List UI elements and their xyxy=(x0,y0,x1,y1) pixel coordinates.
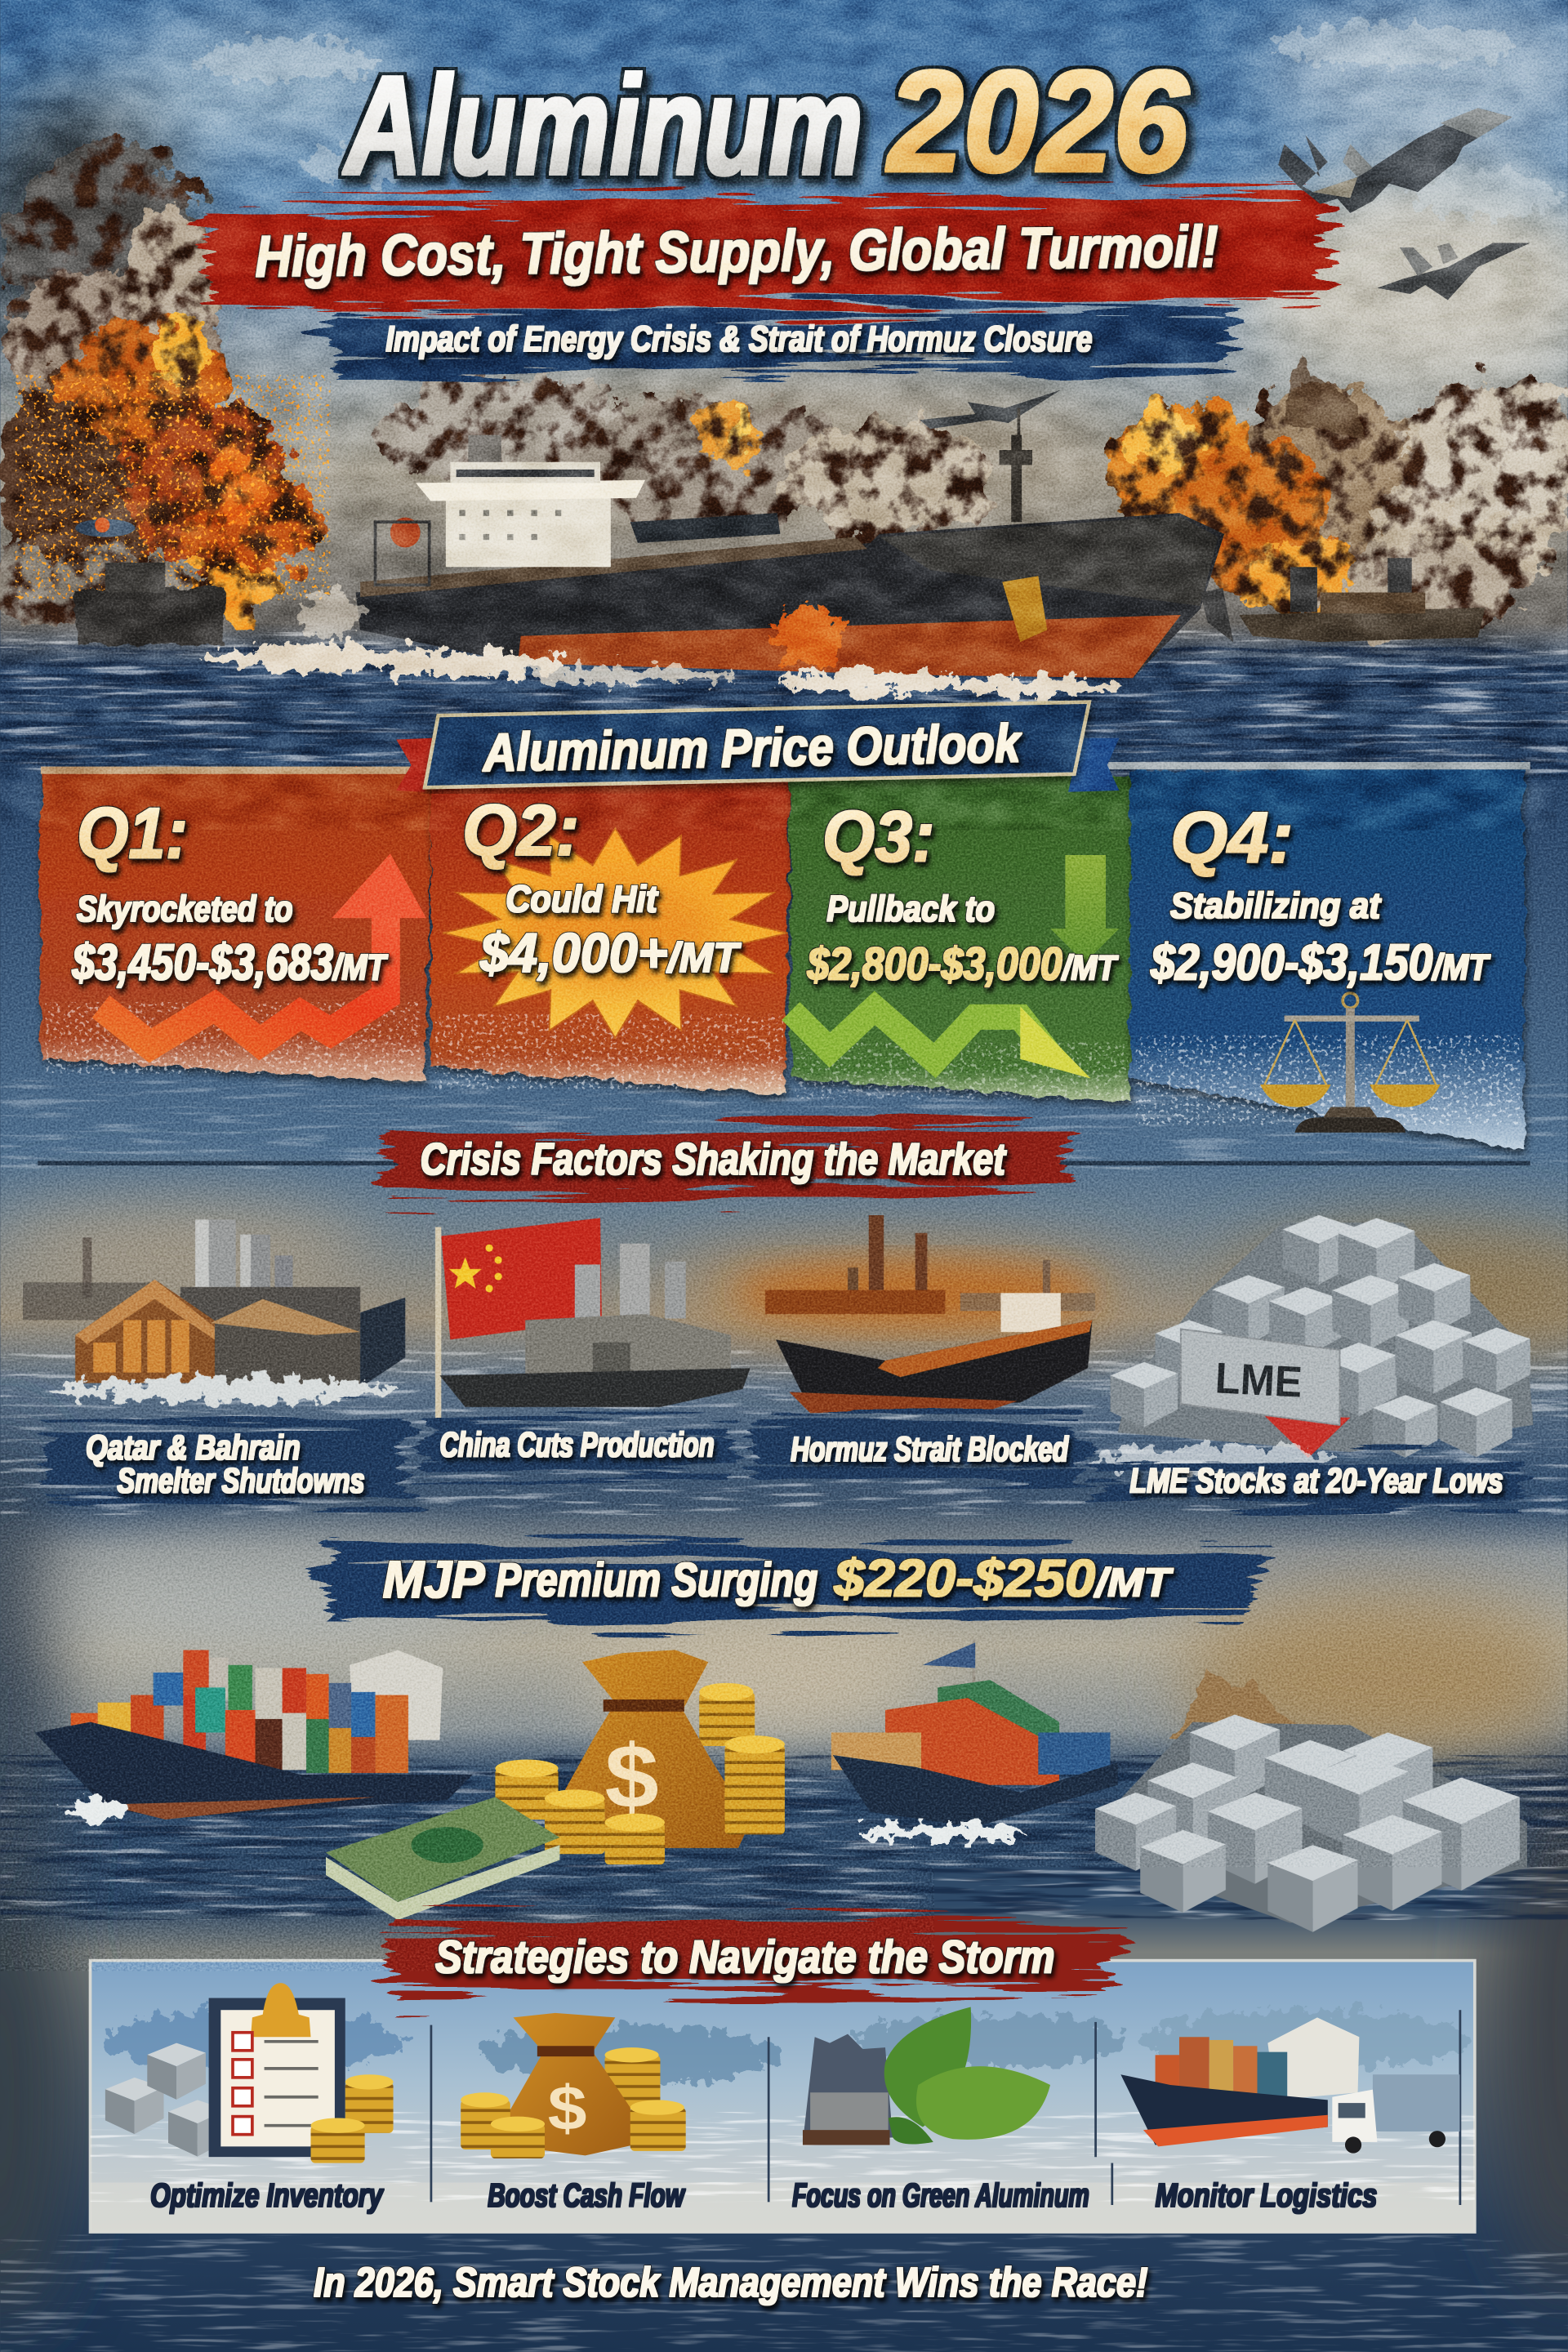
containers xyxy=(71,1650,408,1773)
coin stacks front xyxy=(724,1744,785,1834)
panel: strategies xyxy=(91,1961,1475,2232)
footer slogan: In 2026, Smart Stock Management Wins the Race! xyxy=(314,2258,1147,2305)
superstructure xyxy=(350,1650,443,1740)
label: Focus on Green Aluminum: Focus on Green Aluminum xyxy=(792,2176,1089,2214)
superstructure xyxy=(375,435,645,585)
label: Monitor Logistics: Monitor Logistics xyxy=(1156,2176,1377,2214)
Q4 text: Stabilizing at xyxy=(1170,886,1382,926)
Q3 text: Pullback to xyxy=(826,889,995,929)
icon: inventory clipboard xyxy=(105,1983,394,2163)
heading: price outlook ribbon: Aluminum Price Outlook xyxy=(481,714,1023,783)
container ship small xyxy=(831,1640,1118,1842)
hero scene: fire and smoke xyxy=(0,142,1568,630)
building right xyxy=(215,1302,360,1388)
caption: Qatar and Bahrain: Qatar & Bahrain xyxy=(86,1428,301,1468)
sub-subtitle: Impact of Energy Crisis & Strait of Hormuz Closure xyxy=(385,319,1092,359)
factor: Hormuz strait blocked xyxy=(735,1215,1095,1413)
icon: fighter jet 2 xyxy=(1377,243,1530,300)
ingot stack xyxy=(1095,1714,1527,1932)
Q2 text: Could Hit xyxy=(506,878,658,920)
fore deck rust xyxy=(880,516,1218,606)
banner: MJP premium: Premium Surging xyxy=(495,1553,817,1606)
container ship large xyxy=(35,1650,473,1821)
title word: 2026: 2026 xyxy=(886,41,1189,202)
factor: Qatar and Bahrain smelter xyxy=(23,1219,405,1401)
label: Optimize Inventory: Optimize Inventory xyxy=(150,2176,385,2214)
title xyxy=(343,41,1189,204)
tanker xyxy=(776,1293,1092,1413)
Q4 price: /MT xyxy=(1432,947,1491,987)
subtitle: High Cost, Tight Supply, Global Turmoil! xyxy=(255,214,1218,290)
rock backdrop xyxy=(1170,1668,1321,1740)
warship silhouette xyxy=(1283,355,1362,438)
water xyxy=(53,1377,398,1401)
icon: falling line xyxy=(791,1006,1091,1079)
icon: money bag and coins: $ xyxy=(605,1726,659,1827)
Q1 text: Skyrocketed to xyxy=(77,889,292,929)
icon: down arrow xyxy=(1050,855,1120,963)
icon: balance scales xyxy=(1260,993,1441,1133)
heading: strategies: Strategies to Navigate the Storm xyxy=(435,1931,1055,1983)
Q3 label: Q3: xyxy=(822,795,935,876)
building left xyxy=(75,1280,236,1383)
banner: subtitle red brush xyxy=(203,189,1328,309)
icon: money bag and coins xyxy=(326,1650,785,1920)
heading: crisis factors xyxy=(38,1125,1530,1197)
Q2 price: $4,000+ xyxy=(479,922,668,984)
flag pole xyxy=(435,1227,441,1419)
caption: Qatar and Bahrain xyxy=(86,1428,365,1500)
icon: green aluminum xyxy=(803,2007,1050,2145)
burning refinery backdrop xyxy=(735,1215,1095,1323)
coin stacks behind xyxy=(699,1692,755,1746)
mast xyxy=(1000,408,1032,522)
bag xyxy=(555,1650,751,1848)
panel: Q1 xyxy=(41,767,432,1081)
hull xyxy=(35,1722,473,1818)
factor: China cuts production xyxy=(435,1218,751,1419)
dividers xyxy=(430,2010,1461,2205)
Q3 price: /MT xyxy=(1061,948,1119,987)
cash pile xyxy=(326,1797,559,1902)
caption strips for factors xyxy=(42,1418,1523,1506)
Q1 label: Q1: xyxy=(77,793,188,874)
banner: MJP premium: /MT xyxy=(1094,1559,1174,1605)
sea texture xyxy=(0,630,1568,2352)
right burning boat xyxy=(1239,558,1486,642)
icon: starburst xyxy=(443,828,788,1038)
panel: price outlook quarters xyxy=(41,762,1530,1151)
left burning boat xyxy=(75,518,225,645)
Q3 price: $2,800-$3,000 xyxy=(807,938,1062,990)
factory xyxy=(439,1244,751,1407)
panel: Q3 xyxy=(791,774,1138,1102)
icon: cash flow bag: $ xyxy=(548,2074,586,2144)
banner: MJP premium: MJP xyxy=(383,1550,485,1609)
bow spray xyxy=(203,591,1118,697)
caption: Qatar and Bahrain: Smelter Shutdowns xyxy=(118,1462,365,1500)
banner: blue brush xyxy=(323,309,1238,375)
caption: China: China Cuts Production xyxy=(439,1425,715,1463)
icon: fighter jet 1 xyxy=(1278,108,1512,213)
heading: strategies xyxy=(387,1920,1122,1995)
icon: rising arrow xyxy=(100,853,426,1045)
red down arrow xyxy=(1265,1416,1350,1458)
heading: price outlook ribbon xyxy=(396,702,1120,792)
Q1 price: /MT xyxy=(332,947,389,987)
panel: Q2 xyxy=(430,774,791,1095)
Q2 label: Q2: xyxy=(462,790,579,871)
panel: Q4 xyxy=(1102,762,1530,1151)
deck gear xyxy=(360,537,867,597)
icon: cash flow bag xyxy=(461,2013,686,2158)
tanker ship xyxy=(356,408,1233,678)
icon: aircraft silhouette xyxy=(920,390,1061,429)
factor: LME stocks xyxy=(1095,1215,1533,1470)
smelter stacks xyxy=(23,1219,360,1332)
Q2 price: /MT xyxy=(666,933,742,981)
ingot pile xyxy=(1110,1215,1533,1458)
caption: Hormuz: Hormuz Strait Blocked xyxy=(791,1430,1069,1468)
boot-top red hull xyxy=(518,615,1181,678)
hull xyxy=(356,513,1224,678)
Q4 label: Q4: xyxy=(1170,797,1294,878)
banner: MJP premium: $220-$250 xyxy=(833,1548,1095,1607)
heading: crisis factors: Crisis Factors Shaking the Market xyxy=(421,1134,1007,1184)
banner: MJP premium xyxy=(323,1545,1267,1620)
panel body xyxy=(91,1961,1475,2232)
Q4 price: $2,900-$3,150 xyxy=(1150,933,1433,991)
China flag xyxy=(441,1218,602,1339)
Q1 price: $3,450-$3,683 xyxy=(72,933,333,991)
LME sign: LME xyxy=(1214,1354,1303,1407)
title word: Aluminum: Aluminum xyxy=(343,47,862,204)
icon: logistics ship and truck xyxy=(1120,2017,1459,2154)
LME sign xyxy=(1181,1329,1340,1425)
label: Boost Cash Flow: Boost Cash Flow xyxy=(488,2176,686,2214)
